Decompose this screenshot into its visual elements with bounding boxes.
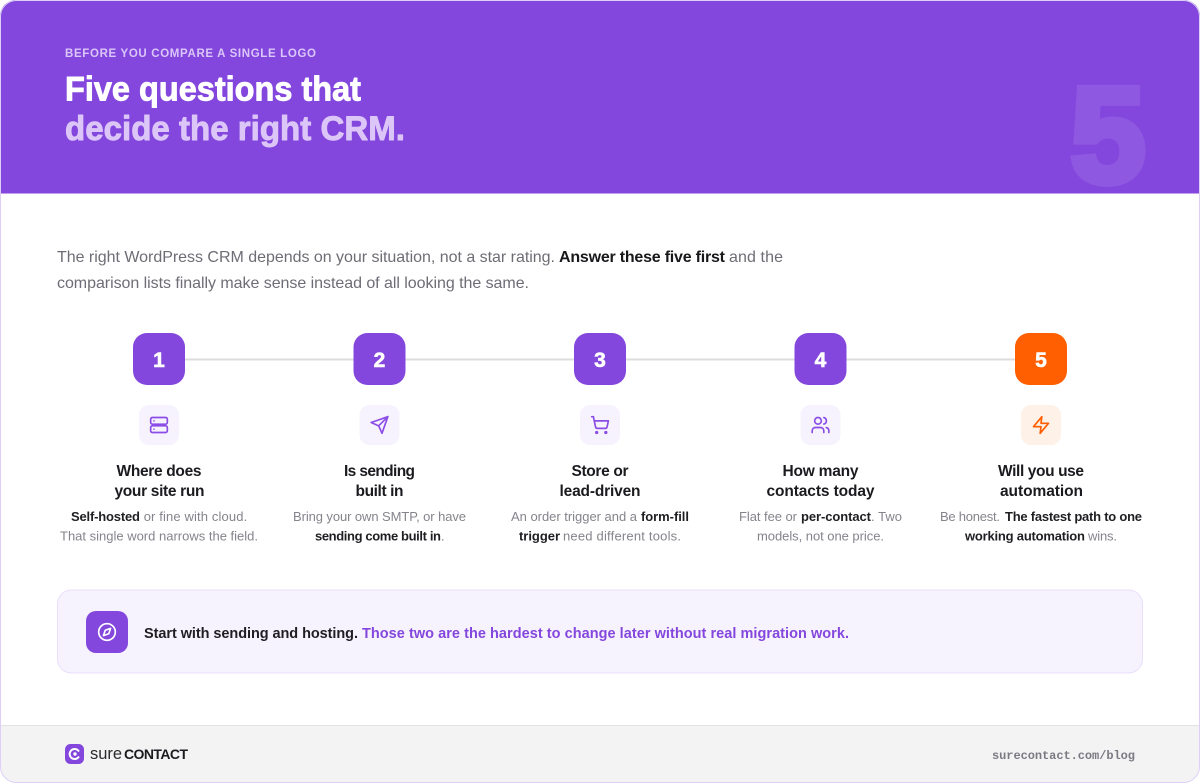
intro text: comparison lists finally make sense instead of all looking the same.: [57, 275, 529, 292]
step 5 description: [940, 509, 1142, 544]
step 1 title: [114, 463, 204, 500]
panel: header: [0, 0, 1200, 211]
step 5 title: [998, 463, 1084, 500]
eyebrow: BEFORE YOU COMPARE A SINGLE LOGO: [65, 48, 316, 60]
icon: logo mark: [65, 744, 84, 764]
icon: paper plane: [360, 405, 400, 445]
step 1 title: your site run: [114, 483, 204, 500]
logo wordmark: sure: [90, 745, 122, 763]
step 2 title: built in: [356, 483, 404, 500]
step 3 description: form-fill: [641, 509, 689, 524]
step 5 description: wins.: [1087, 528, 1117, 544]
step 1 description: [60, 509, 258, 544]
step 3 title: [560, 463, 640, 500]
title: decide the right CRM.: [65, 110, 405, 148]
step 2: [293, 333, 466, 544]
timeline connector: [159, 358, 1041, 360]
step 2 description: [293, 509, 466, 544]
step 5 description: working automation: [964, 528, 1085, 544]
step 5 description: The fastest path to one: [1005, 509, 1142, 524]
step 3 title: Store or: [572, 463, 628, 480]
intro text: and the: [729, 249, 783, 266]
step 4 description: models, not one price.: [757, 528, 884, 544]
icon: users: [800, 405, 840, 445]
step 3 description: need different tools.: [563, 528, 681, 544]
step 1 description: or fine with cloud.: [144, 509, 247, 524]
step 4 title: [766, 463, 875, 500]
step 2 title: [344, 463, 415, 500]
step 3 description: An order trigger and a: [511, 509, 638, 524]
step 4 title: How many: [782, 463, 859, 480]
step 2 description: .: [441, 528, 445, 544]
step 4 description: [739, 509, 902, 544]
step 3 description: trigger: [519, 528, 560, 544]
callout: [58, 590, 1142, 673]
step 3 title: lead-driven: [560, 483, 640, 500]
step 2 description: Bring your own SMTP, or have: [293, 509, 466, 524]
callout text: Those two are the hardest to change later without real migration work.: [362, 626, 849, 642]
title: Five questions that: [65, 70, 361, 108]
icon: shopping cart: [580, 405, 620, 445]
step 4 number: 4: [815, 349, 827, 372]
logo wordmark: CONTACT: [124, 746, 188, 762]
callout text: Start with sending and hosting.: [144, 626, 358, 642]
step 2 title: Is sending: [344, 463, 415, 480]
step 2 number: [354, 333, 406, 385]
step 4 description: Flat fee or: [739, 509, 798, 524]
step 4 description: . Two: [871, 509, 902, 524]
step 1 number: [133, 333, 185, 385]
step 5 title: Will you use: [998, 463, 1084, 480]
step 5 number: 5: [1035, 349, 1047, 372]
intro text: [57, 249, 783, 292]
icon: compass: [86, 611, 128, 653]
step 1 description: That single word narrows the field.: [60, 528, 258, 544]
step 3: [511, 333, 689, 544]
title: [65, 70, 405, 148]
step 5: [940, 333, 1142, 544]
step 5 number: [1015, 333, 1067, 385]
step 2 number: 2: [374, 349, 385, 372]
step 5 description: Be honest.: [940, 509, 1000, 524]
step 1 title: Where does: [116, 463, 202, 480]
step 1: [60, 333, 258, 544]
step 3 description: [511, 509, 689, 544]
step 4 number: [794, 333, 846, 385]
step 4 description: per-contact: [801, 509, 872, 524]
logo: [65, 744, 188, 764]
step 4 title: contacts today: [766, 483, 875, 500]
step 2 description: sending come built in: [315, 528, 441, 544]
footer url: surecontact.com/blog: [992, 749, 1135, 763]
step 5 title: automation: [1000, 483, 1083, 500]
step 1 description: Self-hosted: [71, 509, 140, 524]
logo wordmark: [90, 750, 188, 759]
step 3 number: [574, 333, 626, 385]
step 4: [739, 333, 902, 544]
panel: footer: [1, 725, 1199, 782]
icon: lightning bolt: [1021, 405, 1061, 445]
step 1 number: 1: [153, 349, 165, 372]
step 3 number: 3: [594, 349, 606, 372]
callout text: [144, 626, 849, 642]
icon: server: [139, 405, 179, 445]
decorative large five: 5: [1070, 59, 1146, 211]
intro text: Answer these five first: [559, 249, 726, 266]
intro text: The right WordPress CRM depends on your situation, not a star rating.: [57, 249, 555, 266]
